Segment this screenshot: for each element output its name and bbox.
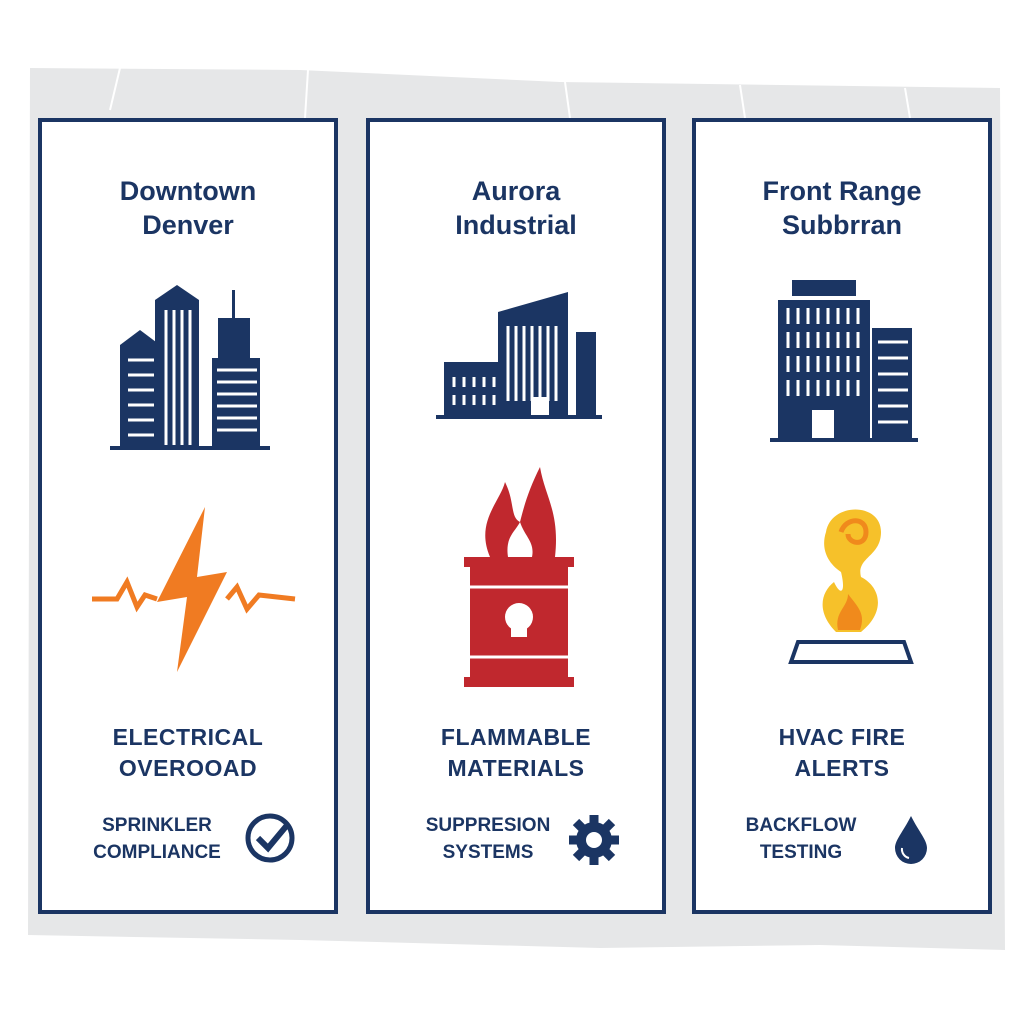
panel: Downtown Denver [38,118,338,914]
heading: Industrial [455,210,577,240]
heading [762,176,922,240]
icon: office building [770,280,918,442]
service: backflow testing: BACKFLOW [746,815,856,836]
risk label [779,724,905,781]
service: suppression systems: SUPPRESION [426,815,550,836]
heading: Denver [142,210,234,240]
icon: gear [569,815,619,865]
service: backflow testing [746,815,856,863]
risk label [441,724,591,781]
icon: flammable barrel [464,467,574,687]
heading [120,176,256,240]
service: sprinkler compliance: COMPLIANCE [93,842,221,863]
heading [455,176,577,240]
risk label: FLAMMABLE [441,724,591,750]
panel: Aurora Industrial [366,118,666,914]
heading: Subbrran [782,210,902,240]
panel: Front Range Suburban [692,118,992,914]
icon: skyscrapers [110,285,270,450]
heading: Aurora [472,176,560,206]
risk label [113,724,263,781]
service: suppression systems [426,815,550,863]
risk label: MATERIALS [448,755,584,781]
icon: lightning [92,507,296,672]
risk label: OVEROOAD [119,755,257,781]
risk label: ELECTRICAL [113,724,263,750]
service: sprinkler compliance [93,815,221,863]
risk label: ALERTS [794,755,890,781]
icon: water drop [895,816,927,864]
service: sprinkler compliance: SPRINKLER [102,815,212,836]
service: suppression systems: SYSTEMS [443,842,533,863]
icon: industrial building [436,292,602,419]
icon: HVAC fire [788,510,914,664]
service: backflow testing: TESTING [760,842,842,863]
heading: Downtown [120,176,256,206]
icon: check circle [246,814,294,862]
risk label: HVAC FIRE [779,724,905,750]
heading: Front Range [762,176,922,206]
